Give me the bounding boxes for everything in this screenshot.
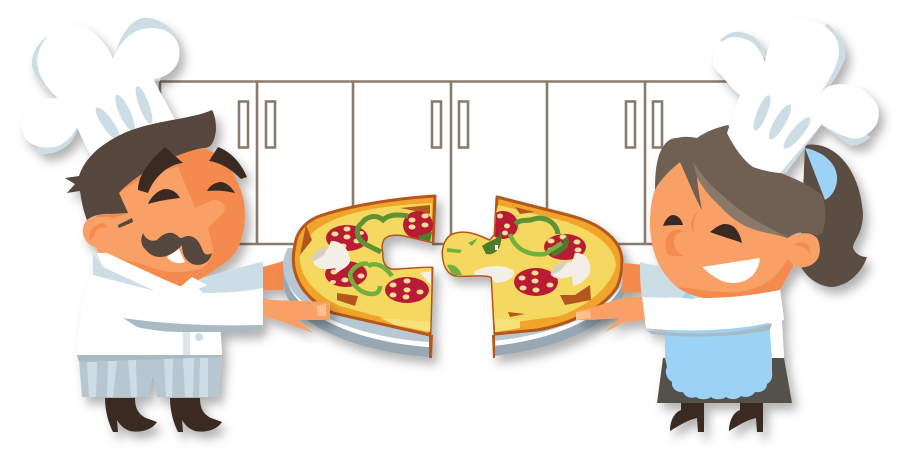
right pizza base (443, 197, 622, 334)
male chef sideburn (118, 218, 133, 228)
left pizza mushroom (313, 241, 350, 273)
male chef collar (93, 253, 207, 293)
left pizza piece on plate (282, 194, 447, 370)
male chef ear (83, 217, 128, 252)
male chef upper arm (263, 260, 287, 290)
hair ribbon (805, 148, 837, 200)
male chef hair (65, 110, 216, 220)
female chef hair (655, 125, 825, 238)
male chef tooth (167, 247, 185, 263)
male chef eyebrows (138, 147, 247, 193)
female chef cheek and nose (666, 210, 698, 256)
male chef hand on plate (263, 298, 330, 333)
female chef eyes (663, 215, 742, 243)
right plate (494, 255, 636, 368)
left pizza base (293, 196, 435, 335)
female chef hat (713, 19, 879, 173)
female chef boots (670, 403, 763, 432)
male chef eyes (148, 182, 235, 204)
male chef hat (22, 18, 180, 160)
right pizza mushrooms (551, 253, 590, 286)
female chef skirt (657, 358, 792, 403)
left pizza toppings (300, 203, 433, 332)
female chef coat (667, 288, 784, 358)
male chef mustache (141, 233, 212, 265)
female chef back arm (622, 263, 645, 293)
left plate (282, 248, 440, 370)
kitchen cabinets (160, 81, 745, 244)
female chef front hand (576, 297, 650, 332)
male chef (22, 18, 287, 432)
female chef smile (702, 258, 760, 283)
male chef coat (77, 262, 263, 362)
male chef striped trousers (79, 355, 222, 397)
female chef ponytail (800, 144, 867, 287)
right pizza toppings (440, 205, 616, 332)
male chef boots (105, 398, 222, 432)
female chef (576, 19, 879, 432)
female chef hair highlight (693, 162, 788, 237)
male chef head (65, 110, 247, 287)
female chef ear (787, 233, 820, 267)
female chef sleeve (640, 262, 784, 337)
female chef apron (665, 322, 772, 399)
female chef head (650, 125, 825, 298)
right pizza piece on plate (441, 196, 636, 368)
